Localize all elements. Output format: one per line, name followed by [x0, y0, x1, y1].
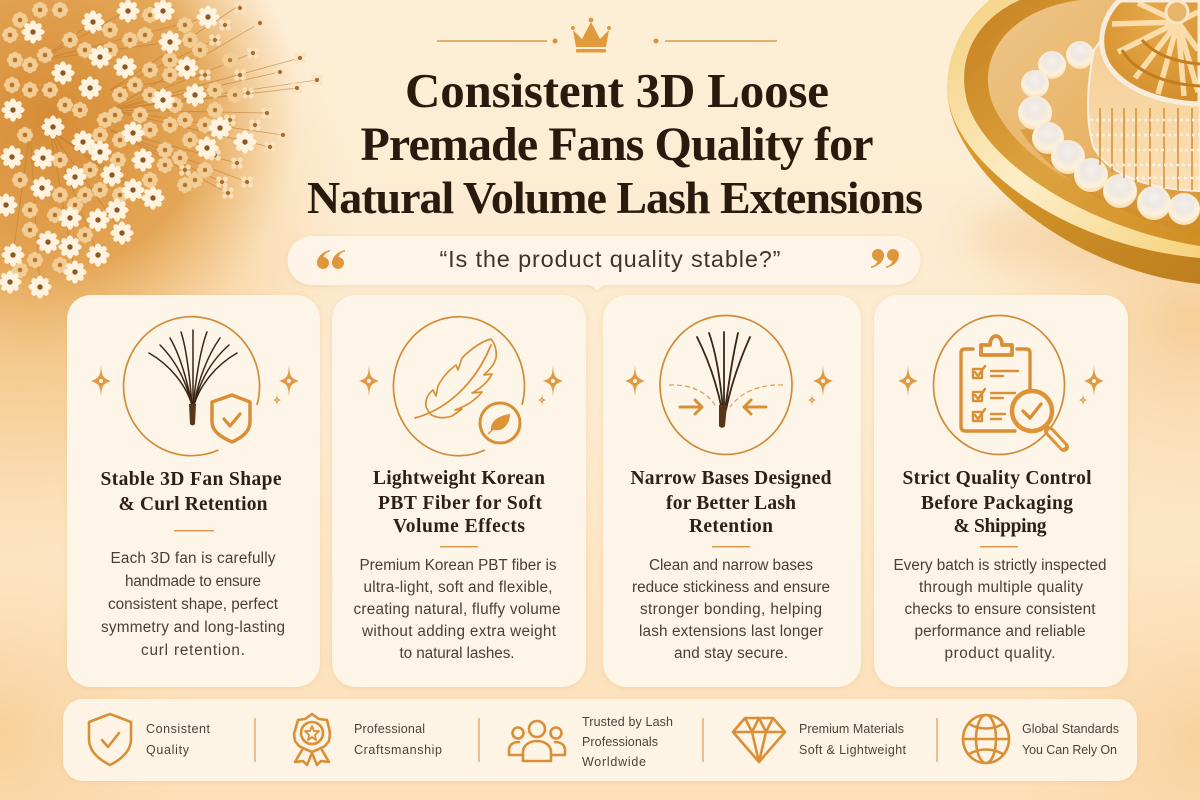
description: consistent shape, perfect — [108, 596, 279, 613]
title: Consistent 3D Loose — [405, 63, 829, 118]
description: handmade to ensure — [125, 573, 261, 590]
description: Every batch is strictly inspected — [894, 557, 1106, 574]
description: checks to ensure consistent — [904, 601, 1096, 618]
benefit: global standards: You Can Rely On — [1022, 743, 1117, 757]
description: ultra-light, soft and flexible, — [364, 579, 552, 596]
icon: sparkles — [898, 365, 1104, 406]
description: performance and reliable — [914, 623, 1086, 640]
benefit: consistent quality — [89, 714, 211, 765]
benefit: professional craftsmanship — [294, 714, 442, 765]
quote pill — [288, 236, 920, 290]
heading: Stable 3D Fan Shape — [100, 469, 282, 490]
description: Each 3D fan is carefully — [110, 550, 276, 567]
description: curl retention. — [141, 642, 245, 659]
heading — [630, 468, 832, 537]
photo: gold tray with pearls and crystal jar — [947, 0, 1200, 284]
photo: baby's breath flowers — [0, 0, 323, 365]
pearls — [1018, 41, 1200, 225]
description: Premium Korean PBT fiber is — [360, 557, 557, 574]
icon: narrow lash base with arrows — [660, 316, 792, 454]
description — [101, 550, 285, 659]
benefit: professional craftsmanship: Craftsmanship — [354, 743, 442, 757]
tan background flowers — [2, 2, 243, 278]
benefit: premium materials — [733, 718, 907, 762]
crown ornament with lines — [437, 18, 777, 53]
opening quote mark — [317, 250, 345, 269]
description: through multiple quality — [919, 579, 1083, 596]
heading — [373, 468, 545, 537]
description — [632, 557, 830, 662]
benefit: trusted by lash professionals: Worldwide — [582, 755, 646, 769]
description: and stay secure. — [674, 645, 788, 662]
description — [894, 557, 1106, 662]
icon: sparkles — [625, 365, 833, 406]
benefit: professional craftsmanship: Professional — [354, 722, 425, 736]
heading: & Shipping — [954, 516, 1047, 537]
tray bowl — [964, 0, 1200, 246]
benefit: trusted by lash professionals: Professionals — [582, 735, 658, 749]
panel: narrow bases — [603, 295, 861, 687]
white foreground flowers — [0, 0, 257, 299]
benefit: trusted by lash professionals — [509, 715, 673, 769]
description — [354, 557, 560, 662]
benefit: premium materials: Soft & Lightweight — [799, 743, 907, 757]
icon: sparkles — [359, 365, 563, 406]
tray rim — [947, 0, 1200, 258]
heading: Strict Quality Control — [902, 468, 1092, 489]
description: to natural lashes. — [400, 645, 514, 662]
panel: lightweight PBT fiber — [332, 295, 586, 687]
bottom benefits bar — [63, 699, 1137, 781]
heading: Narrow Bases Designed — [630, 468, 832, 489]
description: without adding extra weight — [361, 623, 557, 640]
heading: & Curl Retention — [118, 494, 268, 515]
flower stems — [13, 5, 317, 287]
icon: clipboard and magnifier — [934, 316, 1064, 454]
crystal jar — [1088, 0, 1200, 191]
heading: for Better Lash — [666, 493, 796, 514]
description: symmetry and long-lasting — [101, 619, 285, 636]
heading — [100, 469, 282, 515]
description: lash extensions last longer — [639, 623, 823, 640]
heading: Retention — [689, 516, 773, 537]
benefit: premium materials: Premium Materials — [799, 722, 904, 736]
heading: Before Packaging — [921, 493, 1073, 514]
heading — [902, 468, 1092, 537]
panel: stable 3D fan shape — [67, 295, 320, 687]
benefit: consistent quality: Consistent — [146, 722, 211, 736]
closing quote mark — [871, 249, 899, 268]
icon: fan with shield — [124, 317, 260, 456]
pale outer sprigs — [179, 2, 323, 199]
icon: feather with leaf — [393, 317, 524, 456]
heading: Volume Effects — [393, 516, 525, 537]
benefit: consistent quality: Quality — [146, 743, 190, 757]
icon: sparkles — [91, 365, 299, 406]
question: “Is the product quality stable?” — [440, 246, 780, 272]
description: Clean and narrow bases — [649, 557, 813, 574]
description: product quality. — [944, 645, 1056, 662]
title: Premade Fans Quality for — [360, 118, 874, 171]
description: stronger bonding, helping — [640, 601, 822, 618]
pearl reflection — [1020, 125, 1200, 235]
panel: strict quality control — [874, 295, 1128, 687]
tray underside — [947, 0, 1200, 284]
heading: PBT Fiber for Soft — [378, 493, 542, 514]
benefit: trusted by lash professionals: Trusted by Lash — [582, 715, 673, 729]
title: Natural Volume Lash Extensions — [307, 172, 923, 223]
heading: Lightweight Korean — [373, 468, 545, 489]
benefit: global standards: Global Standards — [1022, 722, 1119, 736]
title — [307, 63, 923, 223]
description: creating natural, fluffy volume — [354, 601, 560, 618]
description: reduce stickiness and ensure — [632, 579, 830, 596]
benefit: global standards — [963, 715, 1119, 763]
tray floor — [988, 0, 1200, 228]
